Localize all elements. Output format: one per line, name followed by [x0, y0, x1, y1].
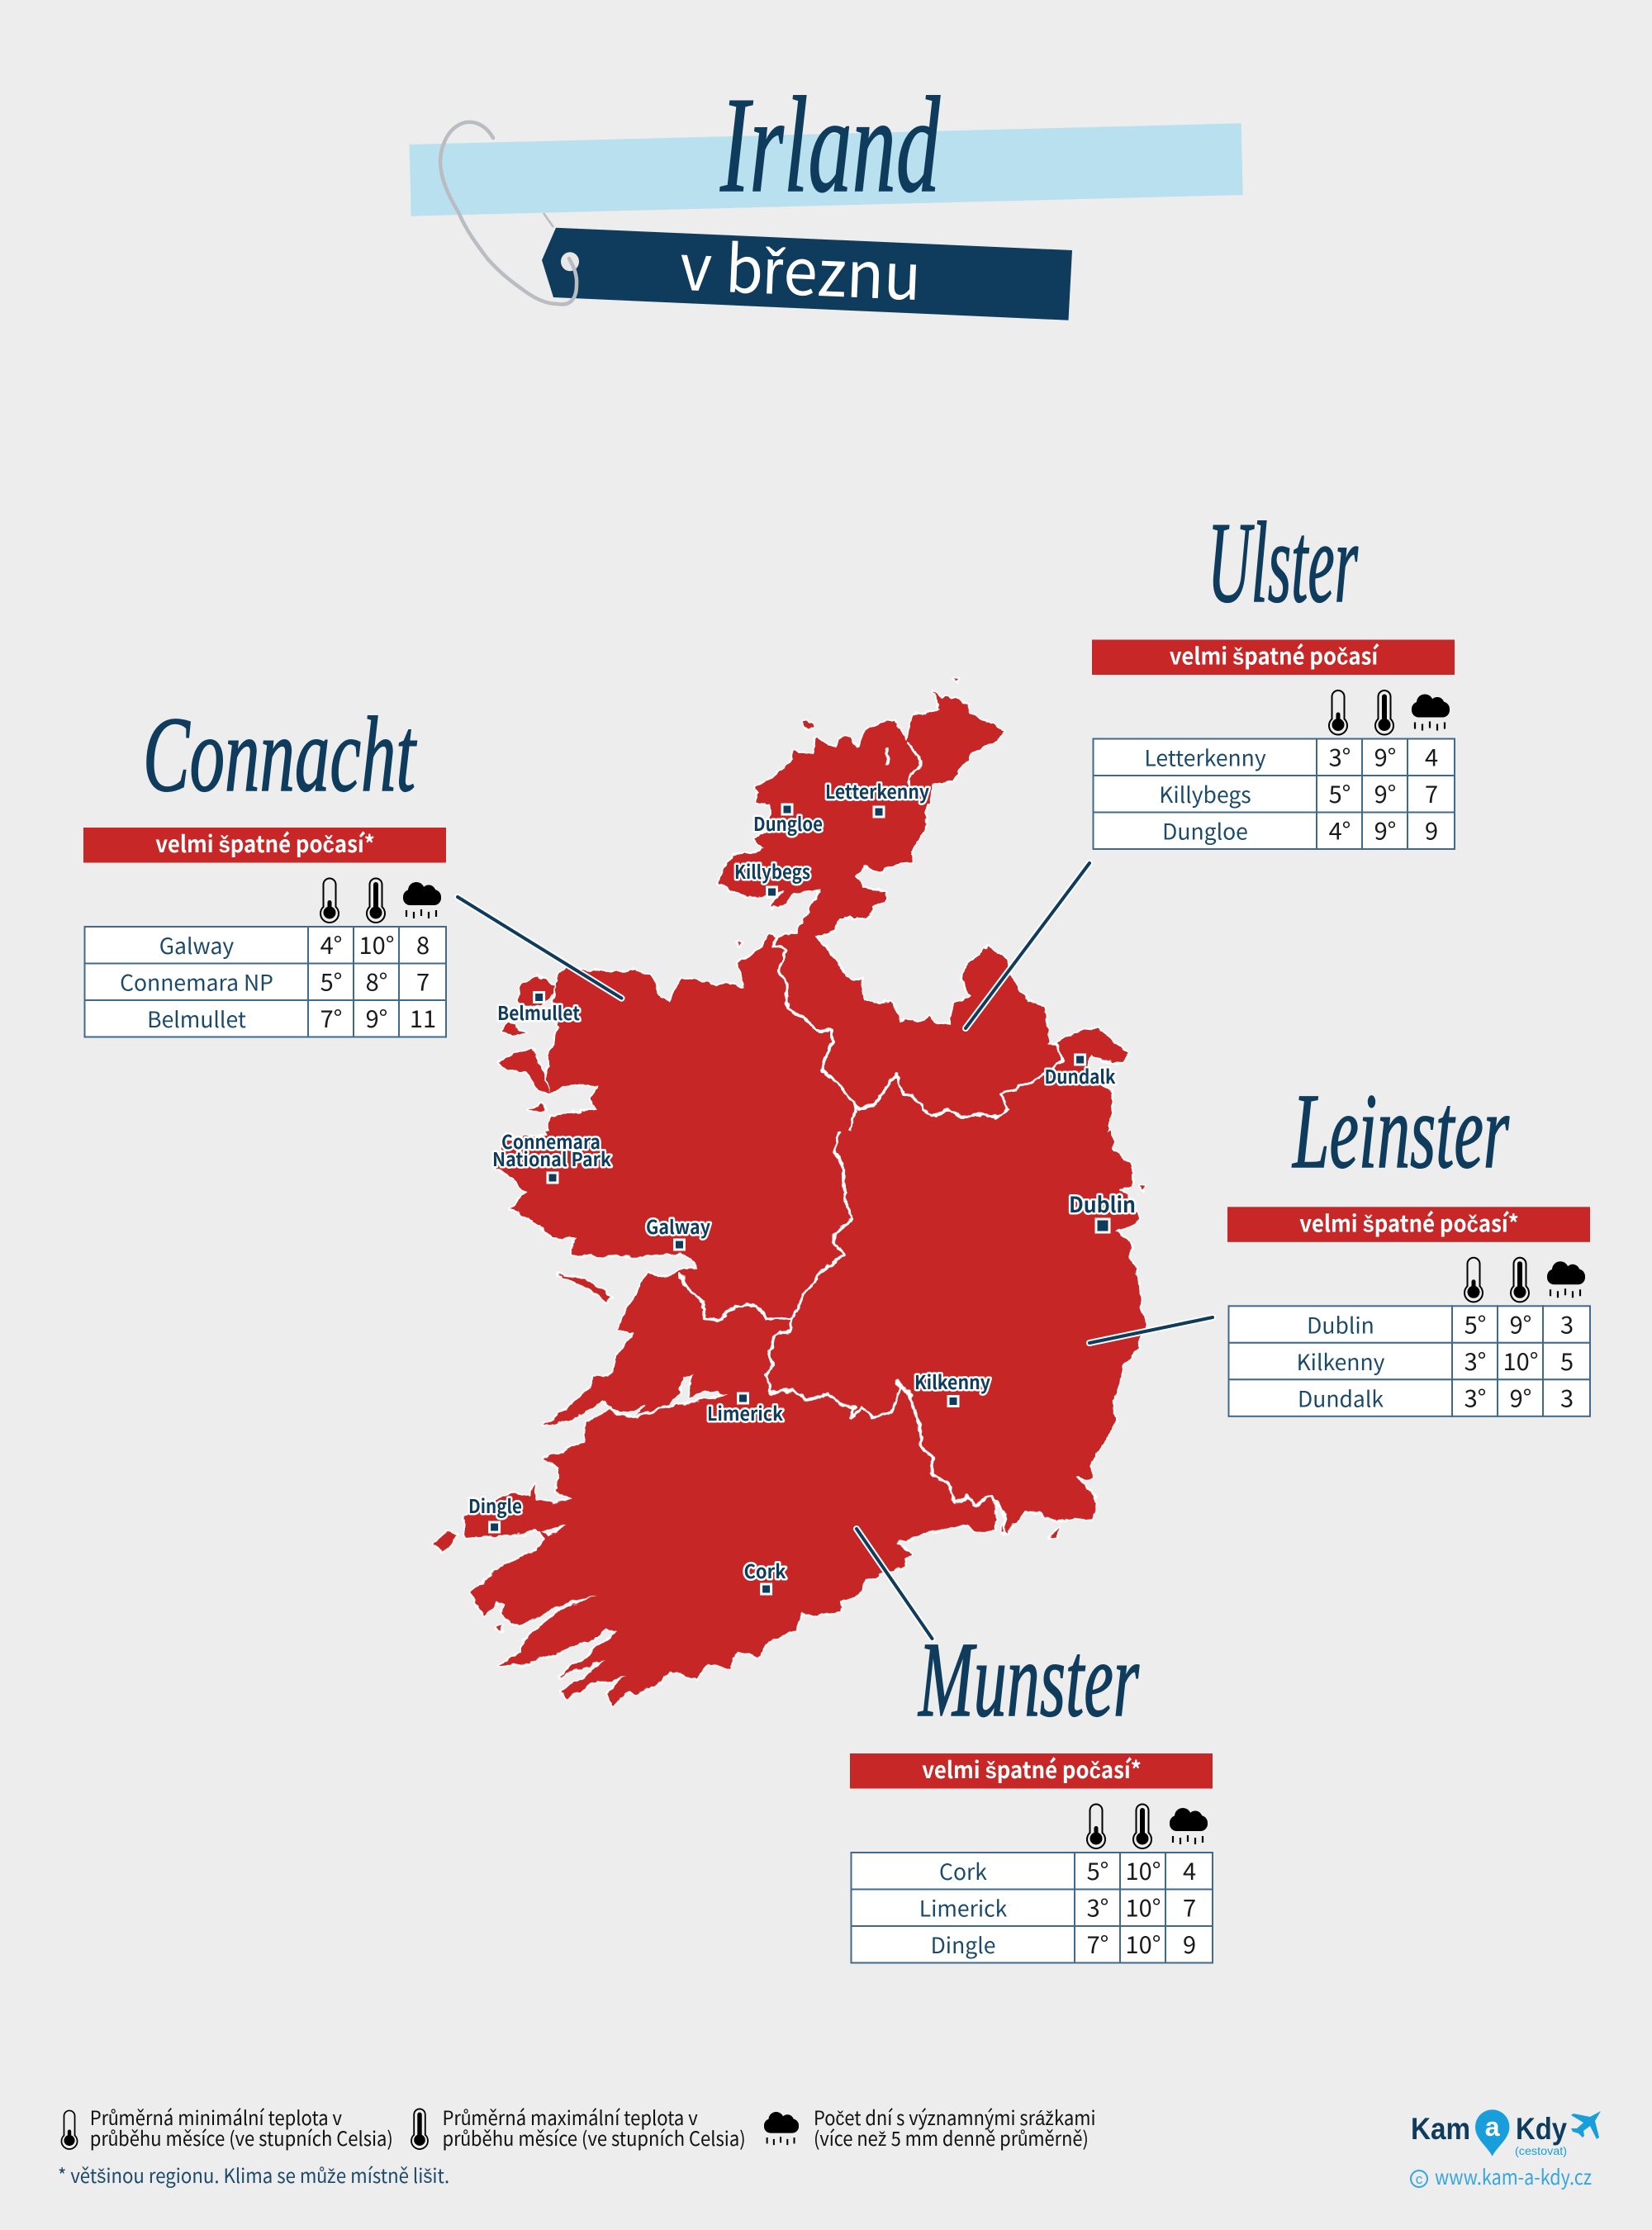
weather bar: velmi špatné počasí* — [155, 826, 375, 859]
table: 7° — [320, 1000, 342, 1035]
marker: Dublin — [1096, 1219, 1109, 1232]
table: Galway — [159, 928, 234, 961]
table: 7 — [1425, 776, 1438, 810]
table: 9° — [1374, 813, 1396, 847]
label: Belmullet: Belmullet — [497, 998, 580, 1026]
legend text: max temperature — [443, 2102, 746, 2152]
label: Limerick: Limerick — [707, 1398, 783, 1426]
weather bar — [83, 826, 446, 862]
marker: Dundalk — [1075, 1055, 1085, 1065]
table: 4° — [1329, 813, 1351, 847]
icon: max temperature — [1511, 1258, 1529, 1302]
title: Irland: Irland — [719, 69, 941, 221]
subtitle: v březnu: v březnu — [678, 216, 923, 319]
legend text: rain — [814, 2102, 1095, 2152]
table: 8° — [366, 963, 387, 998]
table: 3 — [1560, 1306, 1574, 1340]
table: Belmullet — [147, 1002, 246, 1034]
table: Dungloe — [1162, 814, 1248, 846]
connector: Leinster — [1089, 1317, 1213, 1343]
table: 5 — [1560, 1343, 1574, 1378]
table: 10° — [1126, 1853, 1161, 1887]
logo word Kdy: Kdy — [1516, 2112, 1567, 2146]
label: Killybegs: Killybegs — [734, 856, 810, 885]
label: Dungloe: Dungloe — [753, 809, 823, 837]
logo: Kam a Kdy — [1411, 2109, 1601, 2191]
table: 3° — [1087, 1890, 1108, 1924]
icon: rain — [403, 882, 441, 918]
table — [851, 1853, 1213, 1962]
logo word Kam: Kam — [1411, 2112, 1470, 2146]
icon: rain — [1547, 1261, 1585, 1298]
heading: Connacht: Connacht — [143, 695, 417, 814]
table: Connemara NP — [120, 965, 273, 998]
legend text: rain: (více než 5 mm denně průměrně) — [814, 2123, 1089, 2152]
table: 9° — [1374, 776, 1396, 810]
logo pin — [1475, 2109, 1509, 2156]
icon: max temperature — [1133, 1804, 1151, 1848]
label: Galway: Galway — [646, 1212, 710, 1240]
table: 7° — [1087, 1926, 1108, 1961]
label: Dublin: Dublin — [1069, 1189, 1136, 1219]
table: Limerick — [919, 1891, 1008, 1923]
marker: Killybegs — [767, 887, 776, 897]
table: Killybegs — [1159, 777, 1251, 809]
website url: www.kam-a-kdy.cz — [1435, 2161, 1592, 2191]
table: 9 — [1425, 813, 1438, 847]
map of Ireland — [434, 679, 1146, 1706]
table — [84, 927, 446, 1037]
logo tagline: (cestovat) — [1515, 2144, 1567, 2157]
weather bar — [1092, 638, 1455, 675]
icon: rain — [1170, 1808, 1208, 1844]
label: Dundalk: Dundalk — [1044, 1061, 1116, 1089]
table: 10° — [1126, 1926, 1161, 1961]
weather bar: velmi špatné počasí* — [1299, 1205, 1519, 1239]
legend icon: max temperature — [411, 2109, 428, 2149]
icon: max temperature — [367, 879, 385, 923]
marker: Cork — [762, 1584, 771, 1594]
table: 5° — [1329, 776, 1351, 810]
icon: min temperature — [1464, 1258, 1483, 1302]
marker: Galway — [674, 1240, 684, 1250]
map north part — [498, 679, 1129, 1160]
table: 9 — [1183, 1926, 1196, 1961]
icon: rain — [1412, 694, 1450, 730]
table: 4 — [1183, 1853, 1196, 1887]
label: Dingle: Dingle — [468, 1491, 522, 1519]
label: Connemara National Park: Connemara — [501, 1127, 601, 1155]
tag hole — [561, 252, 579, 271]
table: 7 — [1183, 1890, 1196, 1924]
marker: Limerick — [738, 1393, 748, 1403]
icon: max temperature — [1375, 690, 1393, 735]
legend text: min temperature: průběhu měsíce (ve stupních Celsia) — [90, 2123, 393, 2152]
copyright icon: c — [1416, 2171, 1423, 2187]
table: 7 — [416, 963, 430, 998]
table — [1094, 738, 1455, 849]
connector: Ulster — [966, 863, 1089, 1028]
legend text: rain: Počet dní s významnými srážkami — [814, 2102, 1095, 2131]
legend icon: min temperature — [61, 2110, 78, 2149]
legend text: max temperature: Průměrná maximální teplota v — [443, 2102, 698, 2131]
map labels and city markers — [468, 776, 1136, 1594]
label: Cork: Cork — [743, 1556, 786, 1584]
table: 10° — [359, 927, 394, 961]
table: 10° — [1503, 1343, 1538, 1378]
footnote: * většinou regionu. Klima se může místně lišit. — [58, 2160, 449, 2189]
table: Kilkenny — [1297, 1345, 1385, 1377]
table: 3° — [1329, 738, 1351, 773]
table: 4° — [320, 927, 342, 961]
table: 9° — [1510, 1379, 1531, 1414]
heading: Ulster: Ulster — [1208, 499, 1358, 627]
table: 3 — [1560, 1379, 1574, 1414]
table: 4 — [1425, 738, 1438, 773]
panel: Ulster — [1092, 499, 1455, 849]
map south part — [434, 1100, 1146, 1706]
heading: Munster: Munster — [918, 1620, 1139, 1739]
connector: Munster — [857, 1529, 932, 1639]
table: 9° — [1374, 738, 1396, 773]
label: Letterkenny: Letterkenny — [825, 776, 929, 804]
panel body — [1227, 1205, 1590, 1416]
copyright icon — [1411, 2171, 1427, 2187]
tag string short — [544, 213, 553, 227]
marker: Connemara — [548, 1173, 558, 1183]
legend text: min temperature: Průměrná minimální teplota v — [90, 2102, 342, 2131]
table: Dingle — [931, 1928, 995, 1960]
table: 8 — [416, 927, 430, 961]
table: 5° — [1087, 1853, 1108, 1887]
heading: Leinster: Leinster — [1292, 1072, 1509, 1191]
icon: min temperature — [1087, 1804, 1105, 1848]
table: 3° — [1464, 1343, 1486, 1378]
table: 3° — [1464, 1379, 1486, 1414]
marker: Kilkenny — [948, 1396, 958, 1406]
label: National Park: National Park — [492, 1144, 611, 1172]
legend icon: rain — [764, 2112, 799, 2145]
logo letter a: a — [1485, 2112, 1500, 2142]
connector: Connacht — [458, 897, 621, 999]
table: 5° — [320, 963, 342, 998]
table: Letterkenny — [1144, 740, 1266, 773]
legend text: max temperature: průběhu měsíce (ve stupních Celsia) — [443, 2123, 746, 2152]
weather bar — [850, 1752, 1213, 1789]
marker: Dungloe — [782, 804, 792, 814]
panel body — [1092, 638, 1455, 849]
legend — [58, 2102, 1095, 2189]
table: 9° — [1510, 1306, 1531, 1340]
table: 11 — [410, 1000, 436, 1035]
icon: min temperature — [1329, 690, 1347, 735]
table: Dublin — [1307, 1307, 1374, 1340]
weather bar: velmi špatné počasí — [1170, 638, 1379, 671]
icon: plane — [1571, 2111, 1601, 2139]
panel: Connacht — [83, 695, 446, 1037]
panel: Munster — [850, 1620, 1213, 1962]
table: Cork — [939, 1854, 987, 1886]
marker: Letterkenny — [874, 807, 884, 817]
table: 9° — [366, 1000, 387, 1035]
legend text: min temperature — [90, 2102, 393, 2152]
tag ring — [440, 122, 577, 304]
subtitle tag — [542, 228, 1072, 320]
table — [1229, 1306, 1590, 1416]
title band — [410, 123, 1243, 216]
marker: Dingle — [490, 1522, 500, 1532]
table: 5° — [1464, 1306, 1486, 1340]
table: Dundalk — [1298, 1381, 1384, 1413]
panel: Leinster — [1227, 1072, 1590, 1416]
label: Kilkenny: Kilkenny — [914, 1367, 990, 1395]
title block — [410, 69, 1243, 320]
weather bar — [1227, 1205, 1590, 1242]
panel body — [850, 1752, 1213, 1962]
icon: min temperature — [320, 879, 339, 923]
marker: Belmullet — [534, 993, 544, 1003]
weather bar: velmi špatné počasí* — [922, 1752, 1142, 1785]
table: 10° — [1126, 1890, 1161, 1924]
